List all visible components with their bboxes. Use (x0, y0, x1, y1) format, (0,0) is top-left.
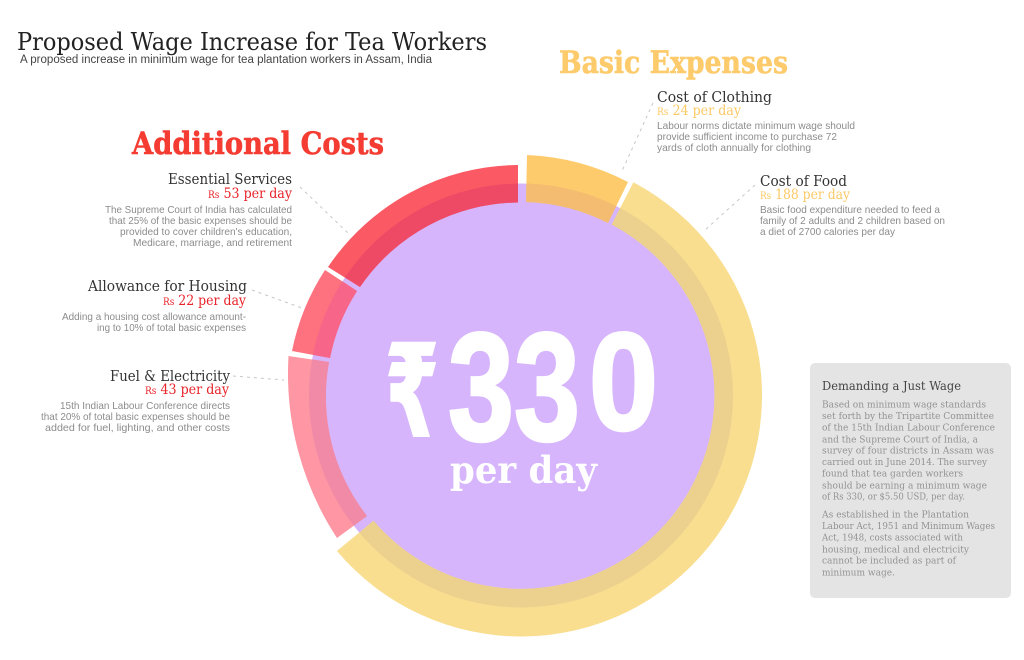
subtitle: A proposed increase in minimum wage for tea plantation workers in Assam, India (20, 54, 433, 66)
block: essential services: that 25% of the basic expenses should be (109, 215, 292, 227)
block: fuel and electricity: added for fuel, lighting, and other costs (45, 422, 230, 434)
panel: demanding a just wage: survey of four districts in Assam was (822, 446, 994, 457)
segment: essential services (328, 165, 518, 287)
block: fuel and electricity: Rs 43 per day (145, 382, 229, 398)
heading: additional costs: Additional Costs (131, 126, 384, 162)
block: essential services: Medicare, marriage, and retirement (133, 237, 292, 249)
block: cost of clothing: Cost of Clothing (657, 90, 772, 106)
block: cost of clothing (657, 90, 855, 154)
number 330: 0 (589, 304, 658, 460)
heading: basic expenses: Basic Expenses (559, 45, 788, 81)
block: essential services: The Supreme Court of India has calculated (105, 204, 292, 216)
number 330: 33 (448, 301, 580, 473)
block: allowance for housing: Allowance for Housing (87, 279, 247, 295)
block: cost of clothing: Labour norms dictate minimum wage should (657, 120, 855, 132)
block: essential services (105, 172, 292, 249)
panel: demanding a just wage: found that tea garden workers (822, 469, 963, 480)
block: cost of clothing: provide sufficient income to purchase 72 (657, 131, 837, 143)
rupee sign: ₹ (385, 318, 439, 467)
block: essential services: provided to cover children's education, (120, 226, 292, 238)
block: allowance for housing: Rs 22 per day (163, 293, 246, 309)
panel: demanding a just wage: housing, medical and electricity (822, 544, 970, 555)
big amount (385, 301, 658, 492)
block: cost of food: a diet of 2700 calories per day (760, 226, 896, 238)
segment: fuel and electricity (288, 356, 367, 538)
panel: demanding a just wage: carried out in June 2014. The survey (822, 457, 988, 468)
panel: demanding a just wage: cannot be included as part of (822, 556, 957, 567)
block: cost of food: Rs 188 per day (760, 187, 850, 203)
block: cost of clothing: Rs 24 per day (657, 103, 741, 119)
panel: demanding a just wage: of the 15th Indian Labour Conference (822, 423, 995, 434)
donut chart (288, 155, 762, 636)
panel: demanding a just wage: Demanding a Just Wage (822, 379, 961, 393)
segment: cost of food (337, 182, 762, 636)
panel: demanding a just wage: and the Supreme Court of India, a (822, 434, 978, 445)
block: essential services: Rs 53 per day (208, 186, 292, 202)
segment: allowance for housing (292, 270, 357, 358)
panel: demanding a just wage: Labour Act, 1951 and Minimum Wages (822, 521, 995, 532)
block: cost of food: family of 2 adults and 2 children based on (760, 215, 945, 227)
leader: essential services (300, 187, 348, 233)
block: cost of clothing: yards of cloth annually for clothing (657, 142, 811, 154)
block: cost of food (760, 174, 945, 238)
panel: demanding a just wage: Act, 1948, costs associated with (821, 533, 963, 544)
block: essential services: Essential Services (168, 172, 292, 188)
leader: food (705, 185, 755, 230)
block: fuel and electricity: 15th Indian Labour Conference directs (60, 400, 230, 412)
panel: demanding a just wage (810, 363, 1011, 598)
block: allowance for housing: ing to 10% of total basic expenses (97, 322, 246, 334)
panel: demanding a just wage: Based on minimum wage standards (822, 399, 986, 410)
panel: demanding a just wage: set forth by the Tripartite Committee (822, 411, 994, 422)
segment: cost of clothing (526, 155, 628, 223)
centre circle (309, 184, 733, 608)
per day: per day (450, 448, 598, 492)
panel: demanding a just wage: minimum wage. (822, 567, 895, 578)
block: cost of food: Cost of Food (760, 174, 847, 190)
block: fuel and electricity: that 20% of total basic expenses should be (41, 411, 230, 423)
title: Proposed Wage Increase for Tea Workers (17, 28, 487, 56)
panel: demanding a just wage: As established in the Plantation (821, 509, 969, 520)
panel: demanding a just wage: of Rs 330, or $5.50 USD, per day. (822, 492, 965, 503)
leader: housing (252, 290, 302, 308)
leader: fuel (233, 376, 284, 380)
block: fuel and electricity: Fuel & Electricity (110, 369, 231, 385)
block: fuel and electricity (41, 369, 231, 434)
block: allowance for housing: Adding a housing cost allowance amount- (62, 311, 246, 323)
leader: clothing (622, 103, 653, 171)
block: allowance for housing (62, 279, 247, 334)
block: cost of food: Basic food expenditure needed to feed a (760, 204, 940, 216)
panel: demanding a just wage: should be earning a minimum wage (822, 480, 987, 491)
